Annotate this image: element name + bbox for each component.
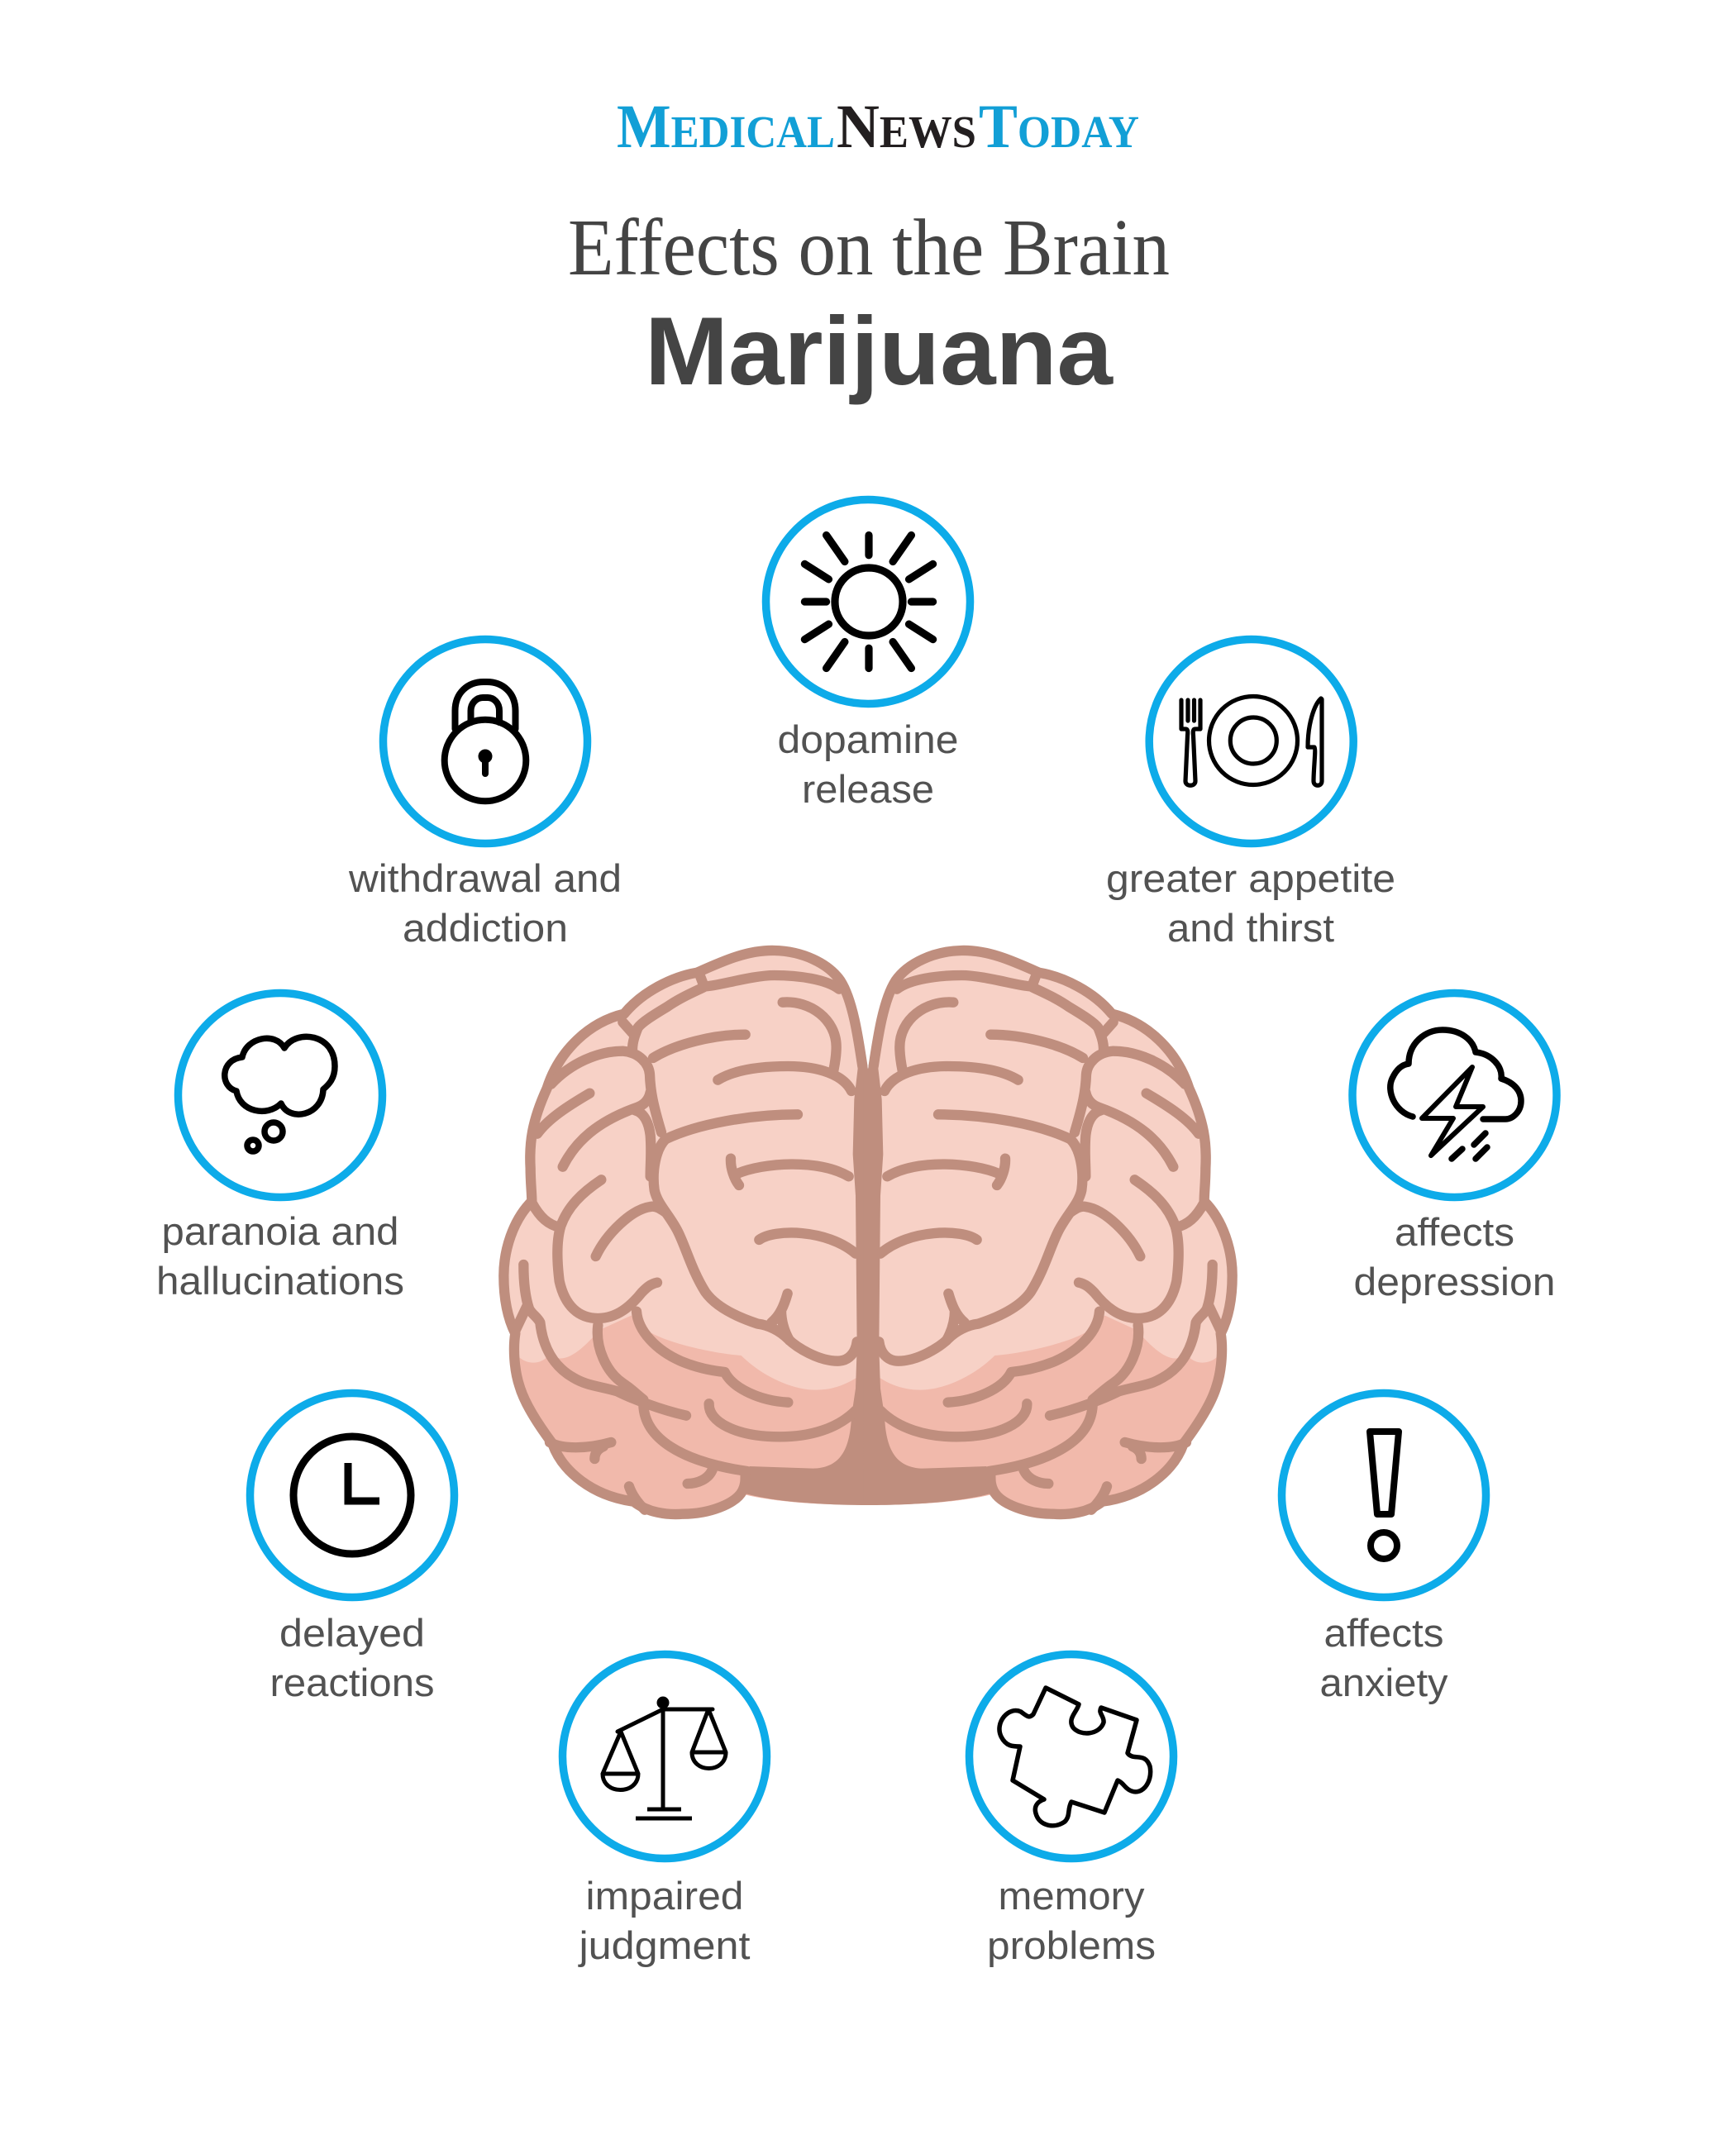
label: greater appetite and thirst bbox=[1106, 856, 1395, 950]
label: withdrawal and addiction bbox=[348, 856, 622, 950]
icon: balance scales bbox=[603, 1699, 726, 1818]
ring: depression bbox=[1352, 993, 1557, 1197]
effect: impaired judgment bbox=[562, 1655, 767, 1967]
ring: memory bbox=[969, 1655, 1174, 1858]
label: paranoia and hallucinations bbox=[156, 1209, 404, 1303]
label: delayed reactions: reactions bbox=[269, 1661, 435, 1704]
label: dopamine release bbox=[777, 717, 959, 811]
logo: Medical News Today: MEDICAL bbox=[617, 93, 835, 161]
label: greater appetite and thirst: and thirst bbox=[1167, 906, 1334, 950]
logo: Medical News Today: TODAY bbox=[979, 93, 1139, 161]
label: memory problems bbox=[987, 1874, 1156, 1967]
icon: puzzle piece bbox=[999, 1688, 1151, 1826]
label: withdrawal and addiction: addiction bbox=[403, 906, 568, 950]
label: dopamine release: release bbox=[802, 767, 934, 811]
label: affects anxiety: anxiety bbox=[1319, 1661, 1448, 1704]
label: paranoia and hallucinations: paranoia and bbox=[162, 1209, 398, 1253]
ring: delayed bbox=[250, 1394, 455, 1597]
icon: thought cloud bbox=[225, 1036, 335, 1151]
effect: delayed reactions bbox=[250, 1394, 455, 1704]
label: affects anxiety: affects bbox=[1324, 1611, 1443, 1655]
title: Marijuana: Marijuana bbox=[645, 297, 1114, 405]
label: affects anxiety bbox=[1319, 1611, 1448, 1704]
title: Effects on the Brain: Effects on the Brain bbox=[568, 203, 1170, 293]
label: affects depression: affects bbox=[1395, 1210, 1514, 1254]
label: memory problems: problems bbox=[987, 1923, 1156, 1967]
icon: sun bbox=[804, 535, 933, 669]
label: memory problems: memory bbox=[999, 1874, 1145, 1918]
icon: padlock bbox=[445, 682, 526, 801]
ring: dopamine bbox=[765, 499, 971, 704]
label: delayed reactions: delayed bbox=[279, 1611, 425, 1655]
icon: fork, plate and knife bbox=[1181, 696, 1322, 785]
effect: withdrawal and addiction bbox=[348, 640, 622, 950]
effect: paranoia and hallucinations bbox=[156, 993, 404, 1303]
logo: Medical News Today: NEWS bbox=[837, 93, 976, 161]
label: dopamine release: dopamine bbox=[777, 717, 959, 761]
effect: affects anxiety bbox=[1281, 1394, 1486, 1704]
ring: anxiety bbox=[1281, 1394, 1486, 1597]
effect: greater appetite and thirst bbox=[1106, 640, 1395, 950]
label: withdrawal and addiction: withdrawal and bbox=[348, 856, 622, 900]
label: affects depression bbox=[1354, 1210, 1556, 1303]
icon: storm cloud bbox=[1390, 1030, 1521, 1159]
label: impaired judgment: impaired bbox=[585, 1874, 744, 1918]
effect: memory problems bbox=[969, 1655, 1174, 1967]
effect: dopamine release bbox=[765, 499, 971, 811]
ring: impaired bbox=[562, 1655, 767, 1858]
label: delayed reactions bbox=[269, 1611, 435, 1704]
ring: paranoia bbox=[179, 993, 382, 1197]
ring: withdrawal bbox=[384, 640, 587, 843]
label: greater appetite and thirst: greater appetite bbox=[1106, 856, 1395, 900]
ring: appetite bbox=[1149, 640, 1353, 843]
icon: clock bbox=[293, 1437, 411, 1554]
logo: Medical News Today bbox=[617, 93, 1139, 161]
label: paranoia and hallucinations: hallucinations bbox=[156, 1259, 404, 1303]
label: impaired judgment: judgment bbox=[577, 1923, 751, 1967]
label: impaired judgment bbox=[577, 1874, 751, 1967]
brain illustration bbox=[496, 951, 1240, 1518]
label: affects depression: depression bbox=[1354, 1260, 1556, 1303]
effect: affects depression bbox=[1352, 993, 1557, 1303]
icon: exclamation mark bbox=[1370, 1432, 1399, 1559]
